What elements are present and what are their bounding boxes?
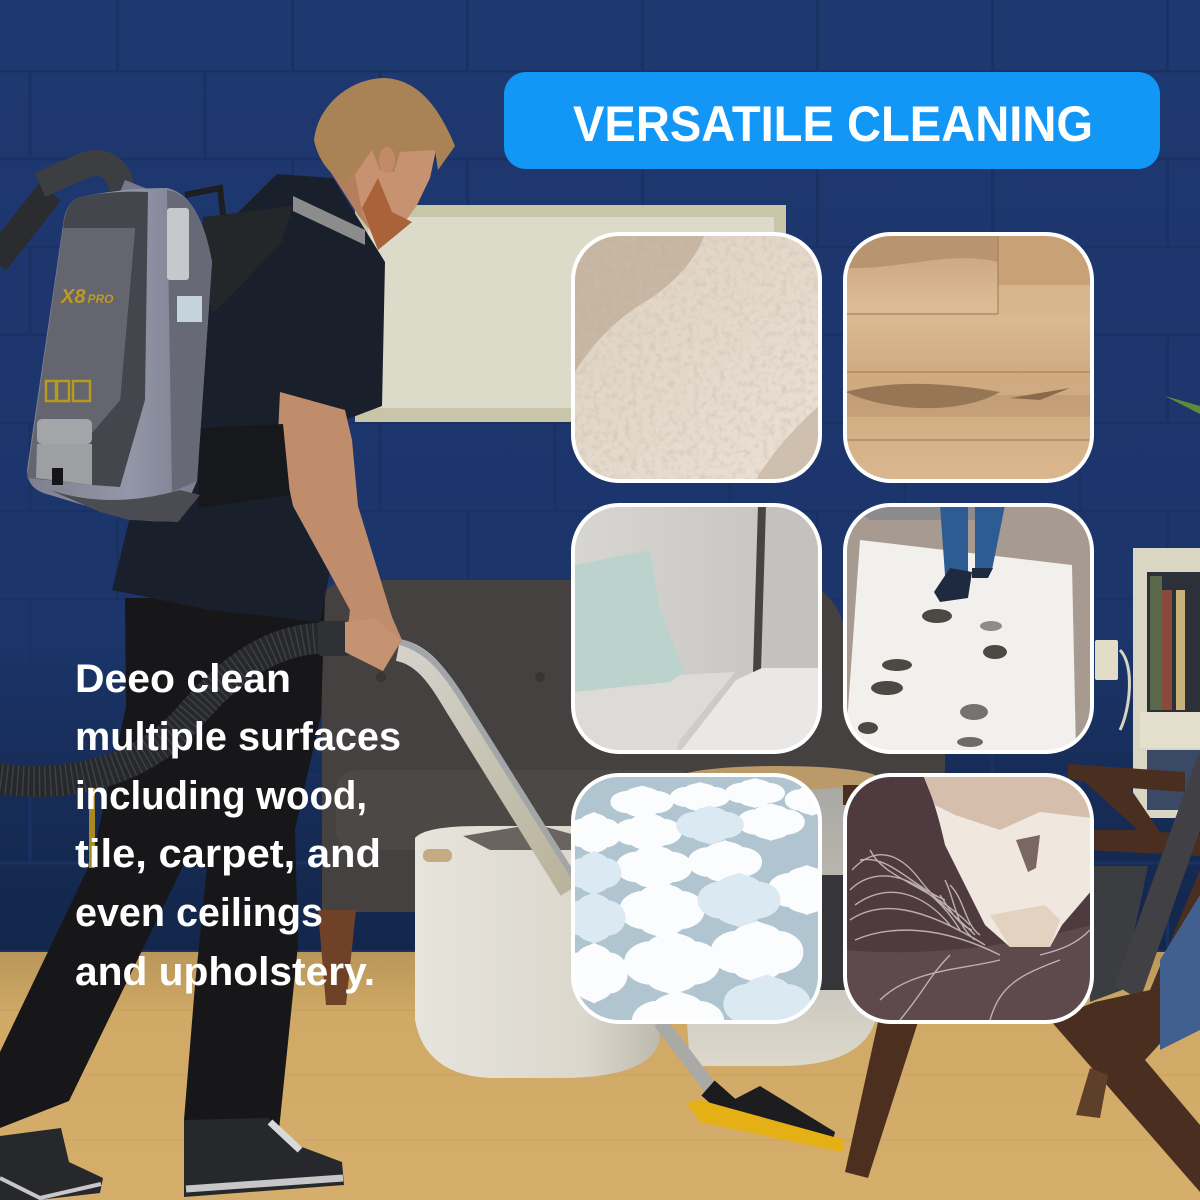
floor mop head bbox=[660, 1022, 845, 1152]
strap loop bbox=[185, 188, 223, 215]
body text bbox=[75, 657, 401, 994]
tile: pet hair on upholstery bbox=[845, 775, 1092, 1022]
tile: muddy footprints on rug bbox=[845, 505, 1092, 752]
body shell bbox=[27, 188, 212, 521]
belt bbox=[198, 424, 290, 508]
corrugated hose bbox=[0, 192, 50, 262]
person bbox=[0, 78, 455, 1200]
sticker bbox=[177, 296, 202, 322]
vacuum wand bbox=[398, 642, 577, 890]
title banner: VERSATILE CLEANING bbox=[573, 96, 1093, 152]
tile: carpet bbox=[573, 234, 820, 481]
wall picture frame bbox=[355, 205, 786, 422]
brand label: X8PRO bbox=[60, 286, 114, 308]
clip bbox=[167, 208, 189, 280]
tile: wood floor bbox=[845, 234, 1092, 481]
mesh strap bbox=[293, 196, 365, 245]
wooden armchair bbox=[843, 750, 1200, 1192]
body text: multiple surfaces bbox=[75, 715, 401, 759]
control panel bbox=[37, 419, 92, 444]
rear section bbox=[167, 190, 212, 492]
elbow bbox=[40, 163, 122, 190]
trousers bbox=[0, 598, 325, 1130]
shirt bbox=[112, 174, 385, 622]
hair bbox=[314, 78, 455, 183]
white storage tubs bbox=[415, 766, 878, 1078]
title banner bbox=[504, 72, 1160, 169]
left shoe bbox=[0, 1128, 103, 1200]
body text: Deeo clean bbox=[75, 657, 291, 701]
background: blue brick wall bbox=[0, 0, 1200, 960]
warning icons bbox=[46, 381, 90, 401]
vacuum hose bbox=[0, 638, 322, 868]
floor bbox=[0, 952, 1200, 1200]
grey sofa bbox=[318, 580, 945, 1005]
right shoe bbox=[184, 1118, 344, 1197]
bottom ridge bbox=[50, 490, 200, 522]
head bbox=[355, 145, 437, 248]
hose handle grip bbox=[318, 618, 400, 671]
bookshelf bbox=[1133, 548, 1200, 818]
body text: tile, carpet, and bbox=[75, 832, 381, 876]
beard bbox=[362, 178, 412, 250]
body text: including wood, bbox=[75, 774, 367, 818]
body text: and upholstery. bbox=[75, 950, 375, 994]
neck bbox=[328, 125, 395, 240]
front panel bbox=[27, 228, 135, 485]
strap pad bbox=[200, 206, 293, 313]
wall outlet and plant leaf bbox=[1095, 396, 1200, 730]
backpack vacuum bbox=[0, 163, 365, 522]
tile: patterned floor tile bbox=[571, 773, 822, 1024]
arm and hand bbox=[278, 392, 402, 671]
body text: even ceilings bbox=[75, 891, 323, 935]
dark top and side band bbox=[63, 192, 148, 487]
ear bbox=[379, 147, 395, 173]
grille bbox=[36, 444, 92, 485]
tile: sofa bbox=[573, 505, 820, 752]
